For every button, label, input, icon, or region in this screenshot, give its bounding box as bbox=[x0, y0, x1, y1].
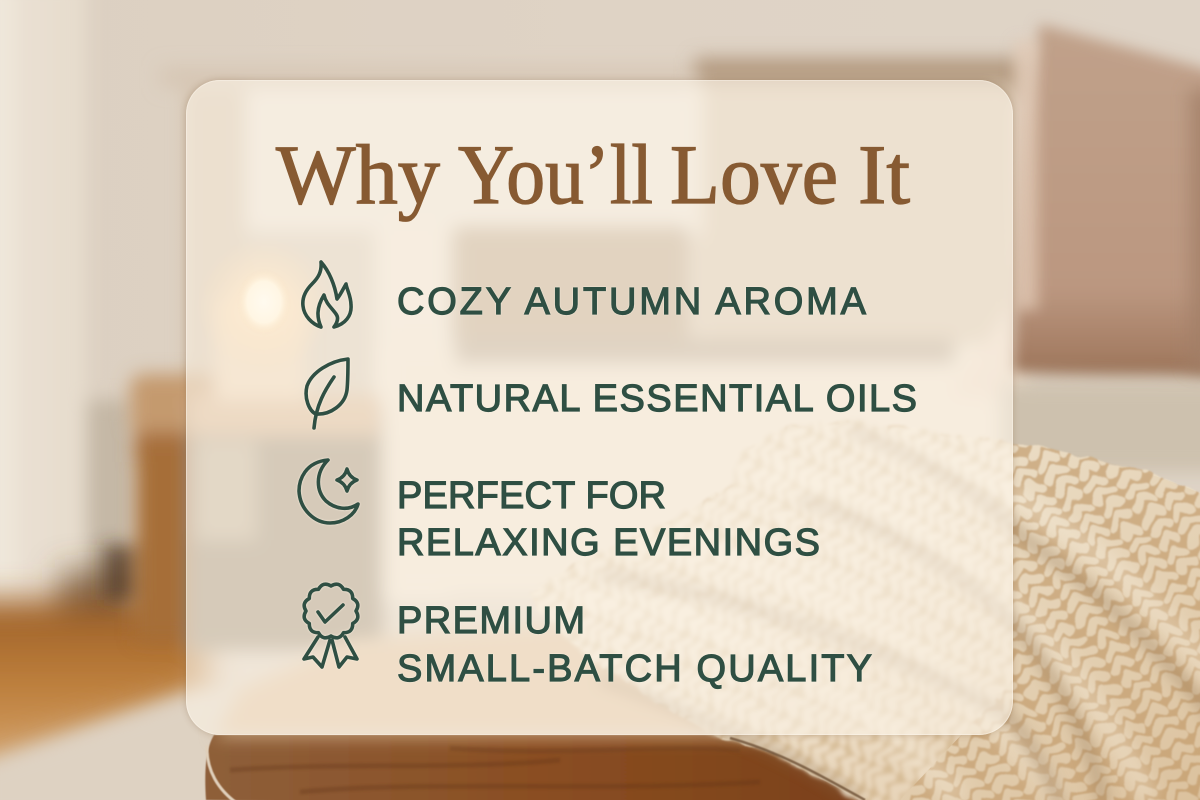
side stool bbox=[130, 374, 220, 436]
title: You’ll bbox=[458, 128, 653, 222]
curtain bbox=[0, 0, 16, 640]
pillow bbox=[1012, 24, 1200, 376]
icon: leaf bbox=[306, 359, 348, 428]
title bbox=[276, 128, 910, 222]
sofa seat bbox=[1000, 382, 1200, 472]
pillow light edge bbox=[1014, 40, 1038, 310]
candle flame highlight bbox=[237, 269, 291, 335]
blanket fringe edge bbox=[730, 738, 865, 800]
panel: frosted card bbox=[186, 80, 1013, 735]
sofa back bbox=[695, 58, 1025, 98]
icon: flame bbox=[303, 262, 351, 327]
label: premium small-batch quality: SMALL-BATCH QUALITY bbox=[397, 648, 872, 690]
title: It bbox=[858, 128, 910, 222]
label: premium small-batch quality: PREMIUM bbox=[397, 600, 585, 642]
side table under panel bbox=[188, 410, 383, 650]
blanket bbox=[530, 423, 1200, 800]
rug bbox=[0, 690, 260, 800]
label: natural essential oils: NATURAL ESSENTIAL OILS bbox=[397, 378, 917, 420]
label: perfect for relaxing evenings: PERFECT FOR bbox=[397, 475, 666, 517]
label: perfect for relaxing evenings bbox=[397, 475, 820, 564]
label: premium small-batch quality bbox=[397, 600, 872, 690]
table top bbox=[205, 620, 880, 800]
rib shadows bbox=[600, 430, 1200, 800]
title: Why bbox=[276, 128, 440, 222]
label: perfect for relaxing evenings: RELAXING EVENINGS bbox=[397, 522, 820, 564]
label: cozy autumn aroma: COZY AUTUMN AROMA bbox=[397, 281, 867, 323]
title: Love bbox=[670, 128, 838, 222]
rib highlights bbox=[560, 440, 1200, 800]
floor bbox=[0, 600, 210, 770]
candle glow bbox=[196, 237, 332, 373]
icon: award rosette bbox=[304, 584, 358, 667]
upper wall tones behind panel bbox=[160, 66, 700, 88]
icon: moon and star bbox=[299, 460, 358, 523]
